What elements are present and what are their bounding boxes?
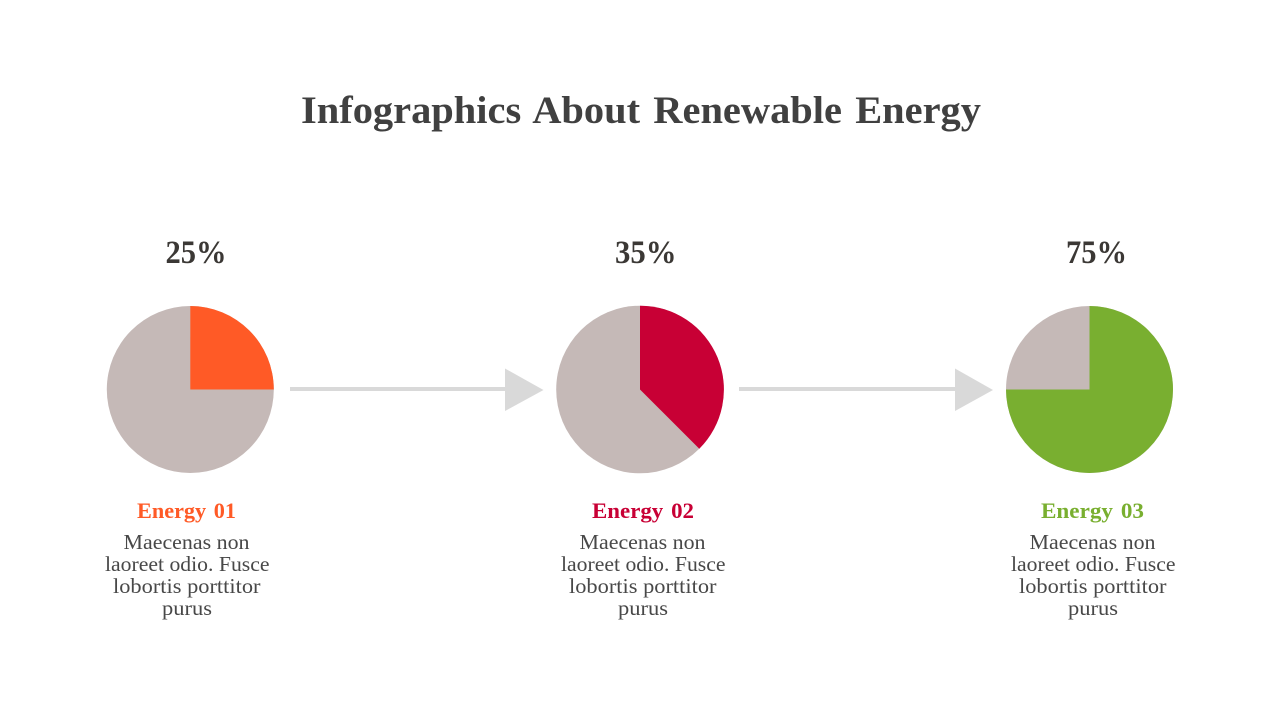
title: Infographics About Renewable Energy <box>301 89 982 132</box>
panel: energy 03 <box>1006 235 1176 620</box>
pie chart: 75% <box>1006 306 1173 473</box>
text block: energy 02 description: lobortis porttitor <box>569 574 716 598</box>
heading: energy 03: Energy 03 <box>1041 498 1144 523</box>
text block: energy 01 description: lobortis porttitor <box>113 574 260 598</box>
heading: energy 01: Energy 01 <box>137 498 236 523</box>
arrow: energy 02 to energy 03 <box>739 368 993 411</box>
text block: energy 02 description <box>561 530 726 620</box>
percentage: 25%: 25% <box>166 235 226 271</box>
text block: energy 03 description: purus <box>1068 596 1118 620</box>
text block: energy 02 description: laoreet odio. Fusce <box>561 552 726 576</box>
text block: energy 01 description: purus <box>162 596 212 620</box>
text block: energy 03 description: Maecenas non <box>1030 530 1156 554</box>
text block: energy 02 description: Maecenas non <box>580 530 706 554</box>
text block: energy 01 description: laoreet odio. Fusce <box>105 552 270 576</box>
text block: energy 01 description <box>105 530 270 620</box>
percentage: 35%: 35% <box>615 235 676 271</box>
heading: energy 02: Energy 02 <box>592 498 694 523</box>
panel: energy 01 <box>105 235 274 620</box>
text block: energy 02 description: purus <box>618 596 668 620</box>
arrow: energy 01 to energy 02 <box>290 368 544 411</box>
text block: energy 03 description <box>1011 530 1176 620</box>
pie chart: 25% <box>107 306 274 473</box>
pie chart: 35% <box>556 306 724 473</box>
panel: energy 02 <box>556 235 726 620</box>
text block: energy 03 description: lobortis porttitor <box>1019 574 1166 598</box>
percentage: 75%: 75% <box>1066 235 1127 271</box>
text block: energy 03 description: laoreet odio. Fusce <box>1011 552 1176 576</box>
text block: energy 01 description: Maecenas non <box>124 530 250 554</box>
